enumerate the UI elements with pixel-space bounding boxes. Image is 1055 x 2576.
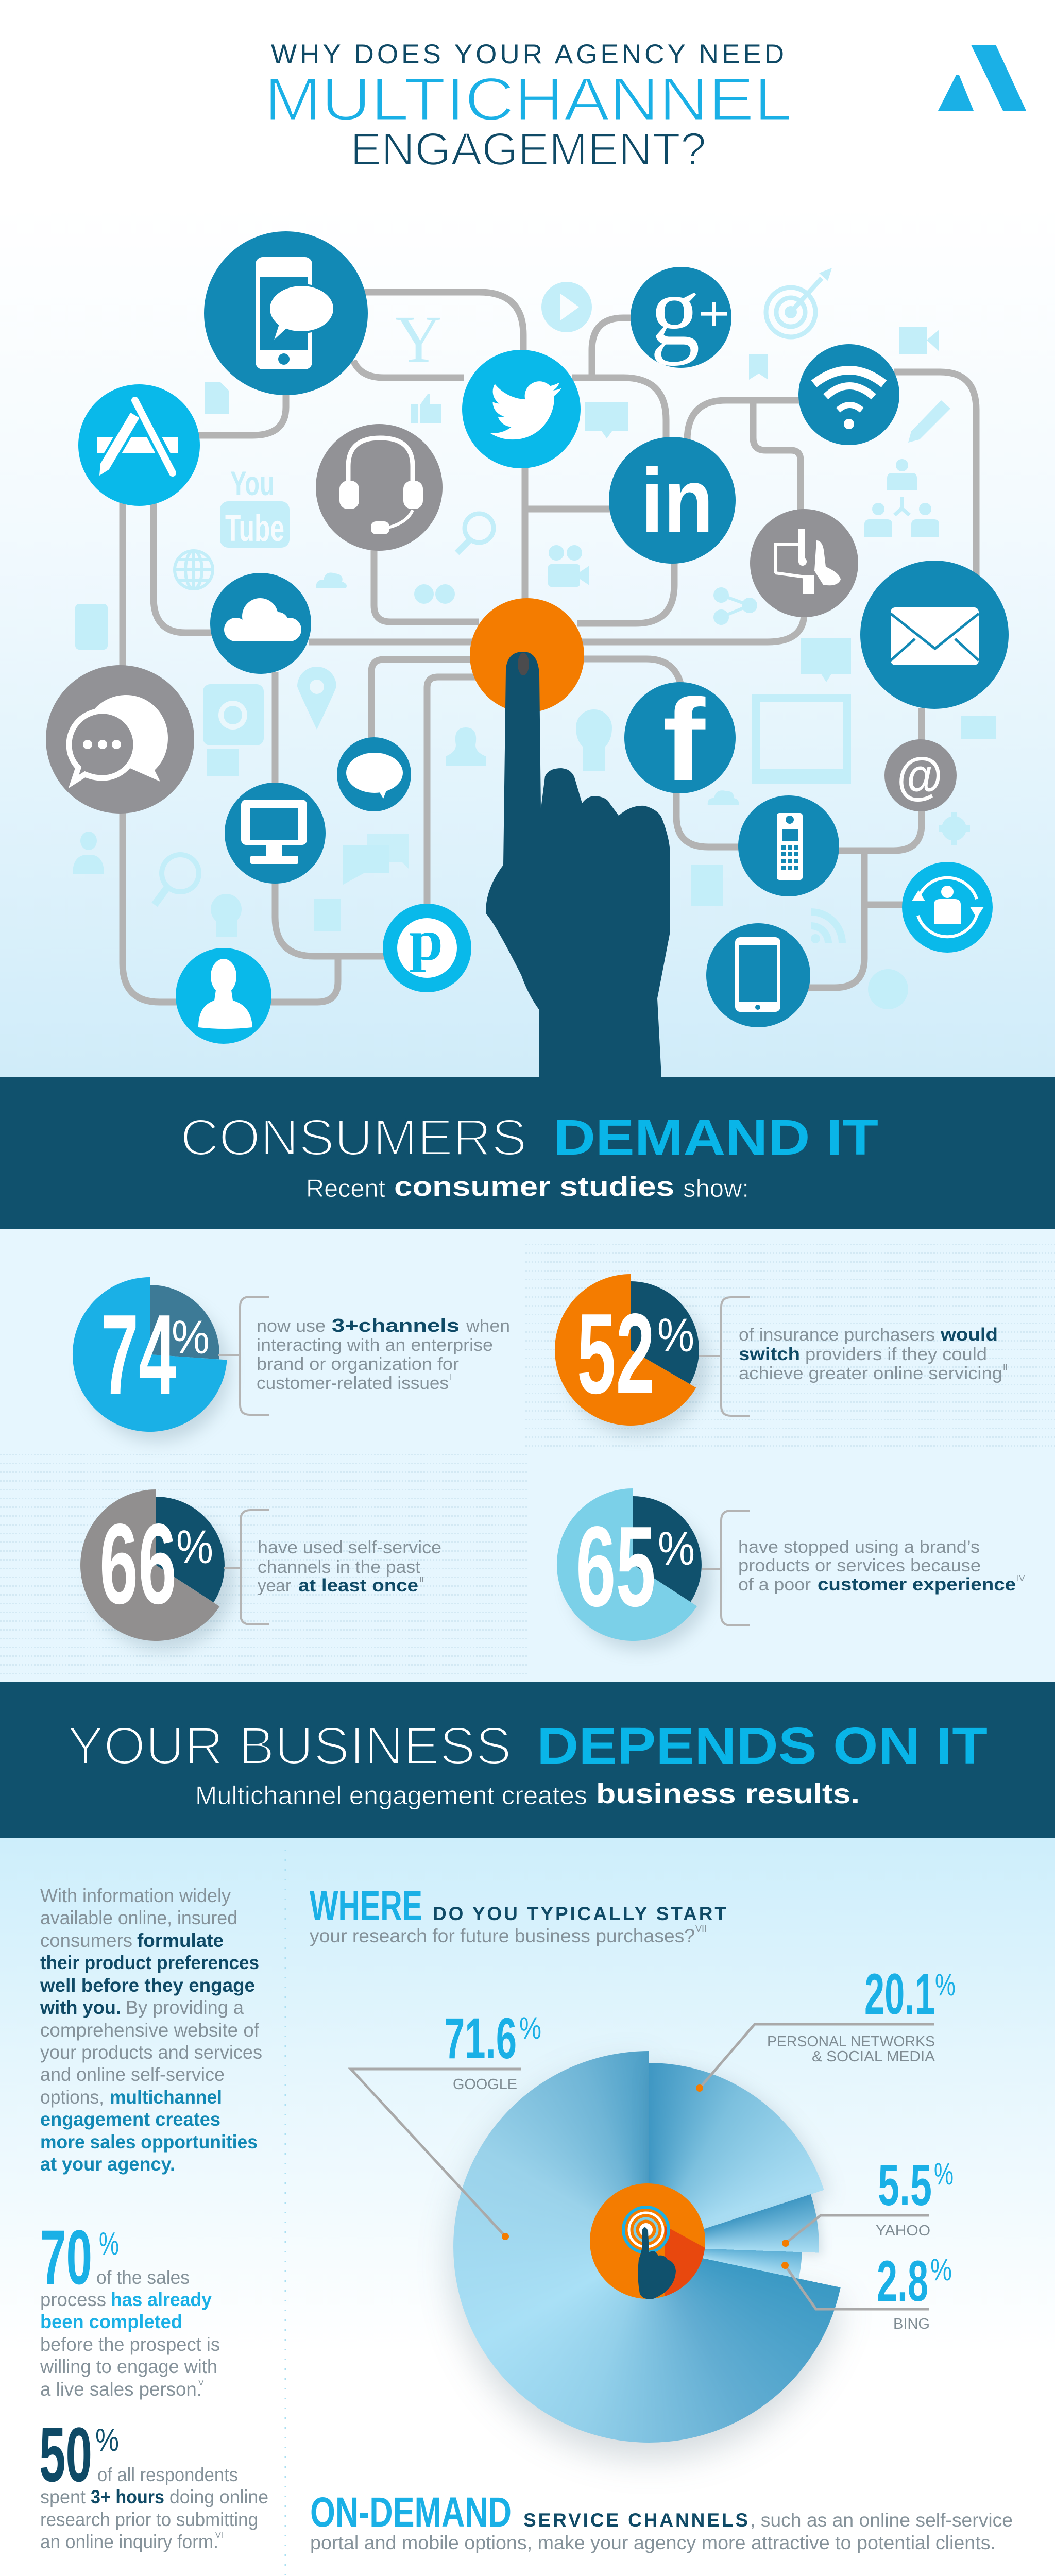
chart: search start pie [439,2051,848,2473]
stat: 52 percent: providers if they could [805,1345,987,1364]
stat: 50 percent: spent [40,2486,86,2507]
callout: bing 2.8 percent [781,2249,952,2332]
stat: 65 percent: of a poor [738,1575,811,1595]
banner: consumers demand it: CONSUMERS [180,1109,527,1166]
banner: your business depends on it: DEPENDS ON IT [537,1717,988,1775]
stat: 66 percent: % [176,1521,213,1573]
faint background icons: Y [395,302,442,377]
stat: 70 percent: willing to engage with [40,2356,217,2377]
icon: person circle [176,948,271,1044]
hero background [0,0,1055,1077]
stat: 70 percent: before the prospect is [40,2334,220,2355]
icon: linkedin circle [609,437,736,564]
callout: google 71.6 percent [351,2006,541,2240]
heading: where do you start: DO YOU TYPICALLY START [433,1903,726,1924]
text block: formulate preferences: their product preferences [40,1952,259,1973]
title [264,39,792,175]
callout: google 71.6 percent: GOOGLE [453,2076,517,2093]
stat: 70 percent: a live sales person. [40,2379,202,2400]
banner: your business depends on it [0,1682,1055,1838]
heading: where do you start: WHERE [310,1883,422,1929]
stat: 65 percent: % [658,1522,695,1575]
banner: consumers demand it: show: [683,1175,749,1202]
text block: formulate preferences: multichannel [110,2087,222,2108]
icon: cloud circle [210,573,311,674]
stat: 70 percent: V [198,2379,204,2387]
stat: 66 percent: at least once [298,1575,418,1596]
banner: consumers demand it [0,1077,1055,1229]
stat: 74 percent: interacting with an enterprise [257,1335,493,1355]
banner: consumers demand it: Recent [306,1175,385,1202]
icon: tablet circle [706,923,810,1027]
text block: formulate preferences: options, [40,2087,104,2108]
banner: your business depends on it: business results. [596,1778,860,1809]
banner: your business depends on it: Multichannel engagement creates [195,1781,587,1810]
heading: where do you start: your research for future business purchases? [310,1925,695,1946]
business panel background [0,1838,1055,2576]
icon: speech bubble circle [337,737,411,811]
text block: formulate preferences: with you. [40,1997,121,2018]
callout: bing 2.8 percent: % [930,2252,952,2287]
stat: 65 percent: customer experience [818,1574,1016,1595]
callout: personal networks 20.1 percent: 20.1 [864,1962,935,2026]
stat: 50 percent: VI [215,2531,223,2540]
stat: 50 percent: doing online [169,2486,268,2507]
title: ENGAGEMENT? [350,123,706,175]
icon: at sign circle [884,739,957,811]
stat: 70 percent: has already [111,2289,212,2310]
icon: linkedin circle: in [641,449,713,552]
faint background icons: You [230,464,275,502]
icon: phone chat circle [204,231,368,395]
text block: formulate preferences: engagement creates [40,2109,220,2130]
faint background icons [73,268,996,1009]
stat: 74 percent: when [466,1316,510,1336]
stat: 74 percent: I [450,1373,452,1382]
callout: bing 2.8 percent: BING [893,2316,930,2332]
text block: on-demand service channels: portal and mobile options, make your agency more attractive to potential clients. [310,2532,996,2553]
stat: 74 percent: customer-related issues [257,1374,449,1393]
icon: google plus circle [631,255,731,368]
callout: personal networks 20.1 percent: & SOCIAL MEDIA [812,2048,935,2065]
icon: desk phone circle [738,795,839,896]
text block: formulate preferences: more sales opportunities [40,2131,258,2153]
icon: monitor circle [225,783,326,884]
callout: personal networks 20.1 percent: % [935,1968,956,2002]
stat: 65 percent: 65 [576,1503,656,1631]
heading: where do you start: VII [695,1924,707,1934]
stat: 70 percent: 70 [40,2214,92,2300]
stat: 66 percent: II [419,1575,424,1584]
callout: google 71.6 percent: 71.6 [444,2006,517,2071]
text block: formulate preferences: formulate [137,1930,224,1951]
stat: 70 percent [40,2214,220,2400]
text block: on-demand service channels [310,2489,1013,2553]
text block: formulate preferences: available online, insured [40,1907,237,1928]
stat: 52 percent [555,1274,1008,1435]
stat: 74 percent: 3+channels [332,1315,460,1336]
text block: on-demand service channels: ON-DEMAND [310,2489,512,2536]
text block: formulate preferences [40,1885,262,2175]
text block: formulate preferences: consumers [40,1930,132,1951]
stat: 52 percent: II [1003,1363,1008,1372]
callout: personal networks 20.1 percent: PERSONAL NETWORKS [767,2033,935,2050]
stat: 52 percent: switch [739,1344,800,1364]
banner: consumers demand it: DEMAND IT [553,1109,878,1165]
stat: 52 percent: of insurance purchasers [739,1325,935,1345]
logo mark top right [938,45,1026,111]
stat: 74 percent: % [172,1311,210,1364]
stat: 50 percent: 3+ hours [91,2486,164,2507]
banner: your business depends on it: YOUR BUSINESS [67,1716,512,1775]
icon: app store circle [78,384,200,506]
stat: 70 percent: been completed [40,2311,182,2332]
stat: 66 percent: year [258,1576,291,1596]
icon: pointing hand [486,652,670,1077]
stat: 65 percent: products or services because [738,1556,981,1575]
stat: 65 percent [557,1488,1025,1650]
callout: google 71.6 percent: % [519,2011,541,2045]
callout: yahoo 5.5 percent: % [934,2157,954,2191]
icon: pinterest circle [383,904,471,992]
stat: 74 percent: 74 [101,1291,176,1419]
text block: formulate preferences: comprehensive website of [40,2020,260,2041]
network connection lines [123,292,976,1002]
stat: 66 percent: channels in the past [258,1557,421,1577]
stat: 74 percent: now use [257,1316,326,1336]
title: MULTICHANNEL [264,65,792,133]
heading: where do you start [310,1883,726,1946]
stat: 74 percent: brand or organization for [257,1354,459,1374]
callout: personal networks 20.1 percent [696,1962,956,2092]
icon: orange touch point [470,598,584,713]
icon: google plus circle: + [698,287,730,340]
icon: wifi circle [798,344,899,445]
icon: customer cycle circle [902,862,993,953]
stat: 50 percent: 50 [39,2411,92,2498]
text block: formulate preferences: well before they engage [40,1975,255,1996]
icon: facebook circle [624,674,736,805]
stat: 66 percent [80,1489,441,1651]
icon: small hand in orange hub [590,2183,705,2299]
stat: 65 percent: IV [1017,1574,1025,1583]
text block: formulate preferences: With information widely [40,1885,231,1906]
stat: 52 percent: % [657,1309,694,1362]
stat: 65 percent: have stopped using a brand’s [738,1537,980,1557]
icon: chat bubbles circle [46,665,194,814]
icon: email circle [860,561,1009,709]
stats panel background [0,1229,1055,1682]
icon: google plus circle: g [650,255,700,366]
faint background icons: Tube [225,508,284,549]
icon: pinterest circle: p [409,909,443,973]
stat: 70 percent: % [99,2226,119,2262]
callout: bing 2.8 percent: 2.8 [877,2249,928,2313]
icon: facebook circle: f [662,674,706,805]
stat: 50 percent: % [95,2422,119,2458]
stat: 52 percent: would [940,1325,998,1345]
stat: 52 percent: achieve greater online servicing [739,1364,1002,1383]
stat: 50 percent: research prior to submitting [40,2509,258,2530]
text block: formulate preferences: and online self-service [40,2064,225,2085]
stat: 70 percent: of the sales [96,2267,190,2288]
stat: 66 percent: have used self-service [258,1538,441,1557]
text block: on-demand service channels: SERVICE CHANNELS [523,2510,748,2531]
stat: 50 percent: an online inquiry form. [40,2531,218,2552]
callout: yahoo 5.5 percent: YAHOO [876,2223,930,2239]
banner: consumers demand it: consumer studies [394,1172,674,1202]
callout: yahoo 5.5 percent [782,2153,954,2247]
text block: formulate preferences: at your agency. [40,2154,175,2175]
icon: twitter circle [462,350,581,468]
text block: on-demand service channels: , such as an online self-service [750,2510,1013,2531]
stat: 52 percent: 52 [577,1290,655,1418]
text block: formulate preferences: By providing a [126,1997,244,2018]
stat: 74 percent [73,1277,510,1442]
callout: yahoo 5.5 percent: 5.5 [878,2153,932,2217]
stat: 50 percent [39,2411,268,2552]
icon: mailbox circle [750,509,858,617]
icon: at sign circle: @ [897,747,943,805]
icon: headset circle [316,424,443,551]
stat: 70 percent: process [40,2289,106,2310]
text block: formulate preferences: your products and services [40,2042,262,2063]
stat: 66 percent: 66 [99,1500,177,1628]
stat: 50 percent: of all respondents [97,2464,238,2485]
title: WHY DOES YOUR AGENCY NEED [271,39,784,70]
